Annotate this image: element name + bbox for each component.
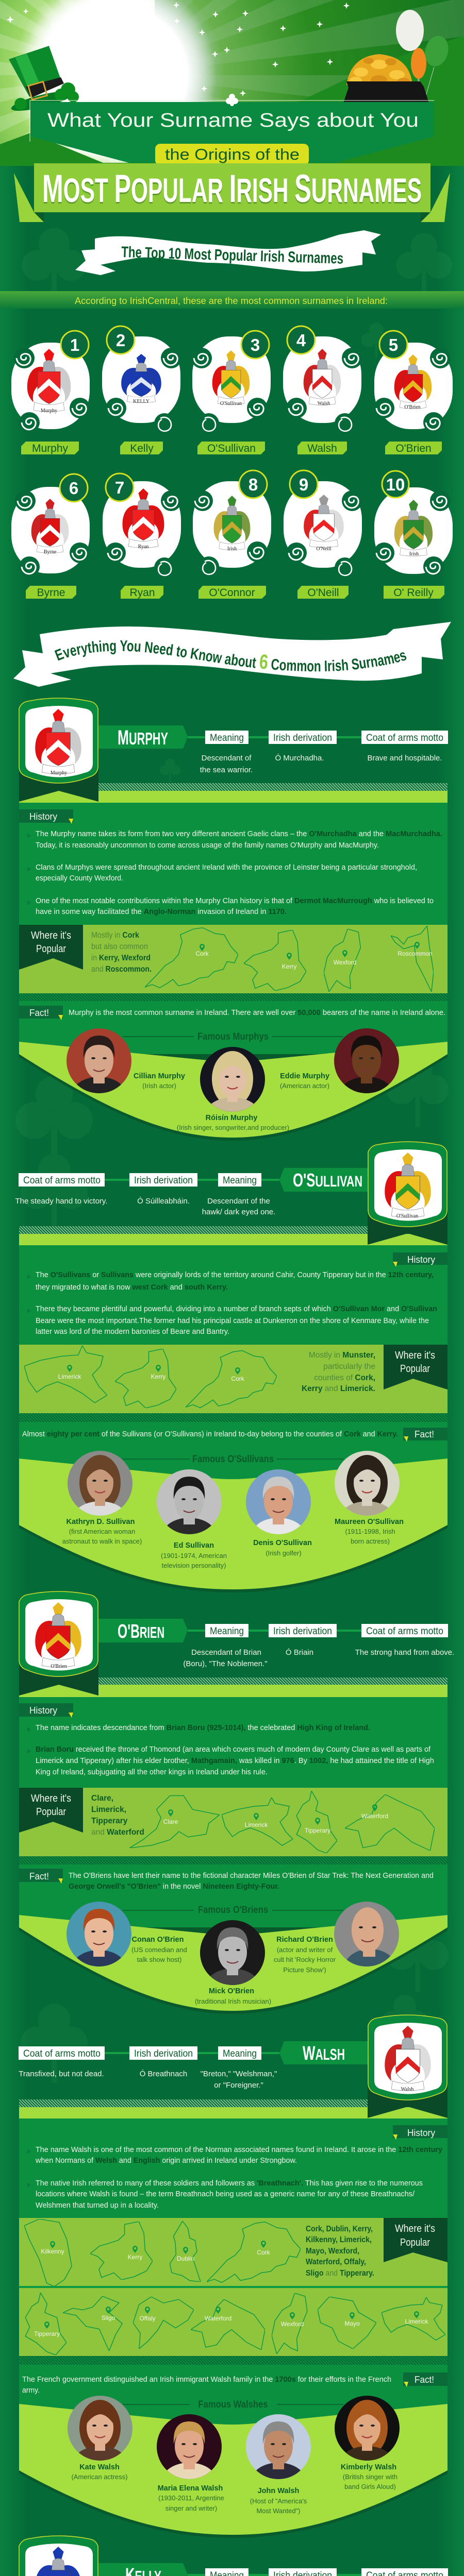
county maps: Sligo — [102, 2314, 115, 2321]
county maps: Roscommon — [397, 950, 433, 957]
famous Walshes — [19, 2396, 448, 2538]
famous O'Sullivans — [19, 1451, 448, 1592]
panel: history: History — [407, 2128, 435, 2138]
values: Ó Murchadha. — [275, 754, 324, 762]
connector and labels — [19, 2046, 279, 2060]
card 8 O'Connor: Irish — [227, 546, 237, 552]
connector and labels: Coat of arms motto — [366, 1626, 443, 1637]
panel: where popular — [19, 1345, 448, 1413]
values: the sea warrior. — [200, 766, 253, 774]
card 3 O'Sullivan — [191, 331, 271, 454]
famous Murphys: (American actor) — [280, 1082, 329, 1090]
county maps: Clare — [163, 1818, 178, 1825]
county maps: Kerry — [128, 2253, 142, 2261]
subtitle pill — [155, 144, 309, 165]
values: The steady hand to victory. — [15, 1197, 107, 1206]
crest badge — [368, 1142, 447, 1227]
county maps — [129, 1791, 435, 1853]
values: The strong hand from above. — [355, 1648, 454, 1657]
card 4 Walsh: 4 — [296, 331, 306, 350]
fact: Fact! — [29, 1008, 49, 1018]
county maps: Waterford — [205, 2315, 231, 2322]
values: Descendant of Brian — [191, 1648, 261, 1657]
panel: history: One of the most notable contributions within the Murphy Clan history is that of Dermot MacMurrough who is believed to — [36, 896, 434, 905]
famous Murphys: (Irish actor) — [142, 1082, 176, 1090]
crest ribbon — [19, 751, 98, 802]
crest badge — [19, 2536, 98, 2576]
connector and labels — [19, 1173, 279, 1187]
county maps — [24, 1346, 277, 1408]
fact: Almost eighty per cent of the Sullivans (or O'Sullivans) in Ireland to-day belong to the counties of Cork and Kerry. — [22, 1430, 398, 1438]
panel: history: especially County Wexford. — [36, 874, 123, 883]
panel: where popular: Where it's — [395, 1350, 435, 1361]
famous Murphys: Róisín Murphy — [206, 1114, 257, 1122]
connector and labels: Coat of arms motto — [23, 2048, 101, 2059]
fact: The French government distinguished an Irish immigrant Walsh family in the 1700s for their efforts in the French — [22, 2375, 391, 2384]
famous Walshes: John Walsh — [258, 2487, 299, 2495]
fact: Fact! — [415, 1429, 434, 1439]
crest ribbon — [19, 1644, 98, 1696]
fact — [19, 1869, 434, 1891]
county maps: Cork — [195, 950, 209, 957]
values — [15, 1197, 275, 1216]
famous O'Sullivans: born actress) — [351, 1537, 390, 1545]
famous Murphys: Cillian Murphy — [134, 1072, 185, 1080]
panel: history — [19, 2119, 448, 2218]
famous Murphys: Famous Murphys — [197, 1031, 269, 1042]
panel: history: locations where Walsh is found – the term Breathnach being used as a generic name for any of these Breathnachs/ — [36, 2190, 415, 2198]
card 10 O' Reilly: Irish — [409, 551, 419, 557]
card 5 O'Brien: O'Brien — [404, 404, 421, 410]
famous O'Sullivans: Kathryn D. Sullivan — [67, 1518, 135, 1526]
famous O'Briens: Famous O'Briens — [198, 1905, 268, 1916]
values — [183, 1648, 454, 1668]
county maps: Mayo — [344, 2320, 360, 2327]
panel: history: The native Irish referred to many of these soldiers and followers as 'Breathnach'. This has given rise to the numerous — [36, 2179, 423, 2188]
card 2 Kelly: 2 — [116, 331, 125, 350]
county maps: Wexford — [334, 959, 356, 966]
county maps: Limerick — [245, 1821, 268, 1828]
famous Walshes: (British singer with — [343, 2473, 397, 2481]
values: Transfixed, but not dead. — [19, 2070, 104, 2078]
main title ribbon — [14, 163, 450, 222]
values: Ó Breathnach — [140, 2070, 187, 2078]
crest badge: Walsh — [401, 2087, 413, 2092]
famous O'Sullivans: astronaut to walk in space) — [62, 1537, 142, 1545]
name ribbon — [279, 2041, 368, 2064]
card 9 O'Neill: 9 — [299, 475, 308, 494]
panel: history: Welshmen that turned up in a locality. — [36, 2201, 159, 2210]
connector and labels: Irish derivation — [134, 2048, 193, 2059]
values: (Boru), "The Noblemen." — [183, 1659, 268, 1668]
county maps — [24, 2219, 445, 2355]
values: Brave and hospitable. — [367, 754, 442, 762]
connector and labels: Meaning — [223, 2048, 257, 2059]
card 8 O'Connor: O'Connor — [209, 587, 255, 599]
panel: fact and famous background — [19, 1001, 448, 1062]
famous Walshes: band Girls Aloud) — [344, 2483, 396, 2490]
card 2 Kelly: Kelly — [130, 443, 154, 454]
famous O'Sullivans: Famous O'Sullivans — [192, 1454, 274, 1465]
famous O'Briens: Richard O'Brien — [276, 1936, 333, 1944]
section: Walsh — [19, 2015, 448, 2538]
famous O'Sullivans: Ed Sullivan — [174, 1541, 214, 1550]
sun rays — [0, 0, 351, 307]
fact: army. — [22, 2386, 40, 2395]
values: "Breton," "Welshman," — [201, 2070, 277, 2078]
fact — [19, 1006, 445, 1020]
card 8 O'Connor: 8 — [248, 475, 258, 494]
county maps: Kerry — [282, 963, 296, 970]
name ribbon — [279, 1168, 368, 1192]
card 7 Ryan — [103, 473, 181, 599]
panel: history — [19, 803, 448, 925]
panel: where popular: Waterford, Offaly, — [306, 2258, 366, 2266]
white ribbon: top 10 — [75, 230, 381, 275]
card 5 O'Brien: 5 — [389, 335, 398, 354]
county maps: Kerry — [151, 1373, 165, 1380]
panel: where popular: Popular — [400, 2237, 430, 2248]
panel: where popular: Mayo, Wexford, — [306, 2247, 359, 2256]
panel: history: Limerick and Tipperary) after his elder brother, Mathgamain, was killed in 976. By 1002, he had attained the title of High — [36, 1756, 434, 1765]
card 5 O'Brien: O'Brien — [395, 443, 432, 454]
famous O'Briens: (traditional Irish musician) — [195, 1997, 271, 2005]
icon: white clover — [226, 94, 238, 106]
title line 1: What Your Surname Says about You — [47, 110, 419, 131]
famous O'Sullivans: Maureen O'Sullivan — [335, 1518, 404, 1526]
famous O'Briens: cult hit 'Rocky Horror — [274, 1956, 336, 1963]
name ribbon: MURPHY — [118, 726, 168, 749]
famous O'Briens: Mick O'Brien — [209, 1987, 254, 1995]
famous Murphys — [19, 1028, 448, 1141]
card 8 O'Connor — [192, 470, 271, 599]
panel: history: King of Ireland, subjugating all the other kings in Ireland under his rule. — [36, 1768, 268, 1776]
panel: where popular: Mostly in Cork — [91, 931, 139, 940]
famous O'Sullivans: (Irish golfer) — [266, 1549, 302, 1557]
panel: history: Brian Boru received the throne of Thomond (an area which covers much of modern day County Clare as well as parts of — [36, 1745, 431, 1754]
section: Murphy — [19, 698, 448, 1141]
stripes and bar — [19, 783, 448, 803]
panel: where popular: Kilkenny, Limerick, — [306, 2235, 372, 2244]
values: Descendant of the — [207, 1197, 270, 1206]
crest badge: Murphy — [51, 770, 67, 776]
card 6 Byrne — [11, 474, 90, 599]
panel: history: when Normans of Welsh and English origin arrived in Ireland under Strongbow. — [35, 2156, 297, 2165]
panel: where popular: and Roscommon. — [91, 965, 152, 974]
panel: where popular: Where it's — [31, 930, 71, 941]
icon: pot of gold — [343, 54, 429, 103]
panel: history: History — [407, 1255, 435, 1265]
panel: where popular: Where it's — [31, 1793, 71, 1804]
icon: leprechaun hat — [9, 46, 79, 115]
section: O'Brien — [19, 1591, 454, 2014]
top ten grid — [11, 326, 453, 599]
famous O'Briens: (US comedian and — [131, 1946, 187, 1954]
card 10 O' Reilly: 10 — [386, 475, 405, 494]
county maps: Kilkenny — [41, 2248, 64, 2255]
connector and labels: Meaning — [223, 1175, 257, 1186]
famous Walshes: Kimberly Walsh — [341, 2463, 396, 2471]
panel: where popular: Popular — [36, 1806, 66, 1818]
crest ribbon — [368, 2067, 448, 2118]
name ribbon — [98, 2563, 188, 2576]
famous Walshes: (American actress) — [71, 2473, 128, 2481]
stars — [7, 2, 350, 96]
panel: where popular: particularly the — [323, 1362, 375, 1371]
county maps: Offaly — [139, 2315, 156, 2322]
values: hawk/ dark eyed one. — [202, 1208, 275, 1216]
card 1 Murphy: 1 — [70, 335, 79, 354]
panel: history: There they became plentiful and powerful, dividing into a number of branch septs of which O'Sullivan Mor and O'Sullivan — [36, 1304, 437, 1313]
county maps — [145, 926, 434, 992]
values — [200, 754, 442, 774]
famous O'Briens: Conan O'Brien — [132, 1936, 184, 1944]
panel: where popular: Tipperary — [91, 1817, 128, 1825]
white ribbon: everything you need: Everything You Need to Know about 6 Common Irish Surnames — [55, 640, 406, 672]
card 10 O' Reilly — [374, 471, 453, 599]
panel: history: latter was lord of the modern baronies of Beare and Bantry. — [36, 1327, 229, 1336]
connector and labels — [188, 1624, 448, 1637]
famous Walshes: Famous Walshes — [198, 2399, 268, 2410]
fact: Fact! — [415, 2375, 434, 2385]
title banner — [30, 94, 434, 163]
panel: history — [19, 1245, 448, 1345]
panel: history: The name indicates descendance from Brian Boru (925-1014), the celebrated High King of Ireland. — [36, 1723, 370, 1732]
card 4 Walsh: Walsh — [318, 401, 330, 406]
icon: balloons — [396, 10, 452, 103]
famous O'Briens: Picture Show') — [283, 1966, 326, 1974]
panel: where popular — [19, 2218, 448, 2356]
famous Murphys: (Irish singer, songwriter,and producer) — [177, 1124, 289, 1131]
panel: history: Today, it is reasonably uncommon to come across usage of the family names O'Murphy and MacMurphy. — [36, 841, 379, 850]
panel: history: they migrated to what is now west Cork and south Kerry. — [36, 1283, 228, 1292]
card 3 O'Sullivan: O'Sullivan — [207, 443, 256, 454]
card 4 Walsh — [283, 326, 362, 454]
card 4 Walsh: Walsh — [307, 443, 337, 454]
card 3 O'Sullivan: 3 — [251, 335, 260, 354]
fact — [22, 2372, 448, 2395]
panel: where popular: in Kerry, Wexford — [91, 954, 151, 962]
crest badge: O'Sullivan — [396, 1213, 418, 1219]
famous O'Sullivans: television personality) — [161, 1562, 226, 1569]
county maps: Tipperary — [34, 2330, 60, 2337]
panel: where popular: Kerry and Limerick. — [302, 1384, 375, 1393]
famous Walshes: Kate Walsh — [79, 2463, 120, 2471]
name ribbon: WALSH — [303, 2043, 345, 2064]
famous Murphys: Eddie Murphy — [280, 1072, 329, 1080]
connector and labels: Meaning — [210, 733, 244, 743]
panel: history: The O'Sullivans or Sullivans were originally lords of the territory around Cahir, County Tipperary but in the 12th century, — [36, 1270, 434, 1279]
fact: Murphy is the most common surname in Ireland. There are well over 50,000 bearers of the name in Ireland alone. — [69, 1008, 445, 1017]
panel: where popular — [19, 1788, 448, 1856]
connector and labels: Coat of arms motto — [23, 1175, 101, 1186]
panel: where popular — [19, 925, 448, 993]
history tab — [19, 809, 73, 824]
famous O'Briens: talk show host) — [137, 1956, 181, 1963]
values: Ó Briain — [286, 1648, 313, 1657]
panel: history: The name Walsh is one of the most common of the Norman associated names found in Ireland. It arose in the 12th century — [36, 2145, 443, 2154]
county maps: Limerick — [405, 2318, 428, 2325]
panel: where popular: Popular — [400, 1363, 430, 1375]
famous Walshes: Most Wanted") — [256, 2507, 301, 2515]
connector and labels — [188, 2568, 448, 2576]
crest badge — [19, 1591, 98, 1676]
card 1 Murphy: Murphy — [41, 408, 57, 414]
county maps: Wexford — [281, 2320, 304, 2328]
card 1 Murphy: Murphy — [32, 443, 69, 454]
county maps: Waterford — [361, 1812, 388, 1820]
famous O'Sullivans: (1901-1974, American — [161, 1552, 227, 1560]
panel: history: Beare were the most important.The former had his principal castle at Dunkerron on the shore of Kenmare Bay, while the — [36, 1316, 429, 1325]
county maps: Dublin — [177, 2255, 194, 2262]
card 1 Murphy — [11, 331, 90, 454]
card 7 Ryan: Ryan — [129, 587, 155, 599]
card 6 Byrne: 6 — [69, 479, 78, 498]
panel: where popular: but also common — [91, 942, 148, 951]
crest badge — [368, 2015, 447, 2100]
famous O'Sullivans: (1911-1998, Irish — [345, 1528, 395, 1535]
name ribbon: O'BRIEN — [118, 1621, 164, 1642]
famous O'Sullivans: (first American woman — [69, 1528, 135, 1535]
connector and labels: Irish derivation — [134, 1175, 193, 1186]
famous Walshes: (1930-2011, Argentine — [158, 2494, 224, 2502]
card 10 O' Reilly: O' Reilly — [393, 587, 434, 599]
subtitle pill: the Origins of the — [165, 145, 300, 163]
panel: where popular: and Waterford — [91, 1828, 144, 1837]
fact: George Orwell's "O'Brien" in the novel Nineteen Eighty-Four. — [69, 1882, 279, 1891]
card 9 O'Neill: O'Neill — [316, 546, 332, 552]
white ribbon: top 10: The Top 10 Most Popular Irish Surnames — [121, 244, 344, 267]
connector and labels: Coat of arms motto — [366, 733, 443, 743]
history tab: History — [29, 811, 57, 822]
famous O'Briens — [19, 1902, 448, 2014]
fact — [22, 1428, 448, 1442]
panel: history: History — [29, 1705, 57, 1716]
panel: where popular: Cork, Dublin, Kerry, — [306, 2225, 373, 2233]
card 9 O'Neill — [284, 470, 362, 599]
fact: Fact! — [29, 1871, 49, 1882]
panel: history: have in some way facilitated the Anglo-Norman invasion of Ireland in 1170. — [36, 907, 287, 916]
panel: where popular: counties of Cork, — [314, 1374, 375, 1382]
card 3 O'Sullivan: O'Sullivan — [220, 401, 242, 406]
panel: where popular: Clare, — [91, 1794, 113, 1803]
values: or "Foreigner." — [214, 2081, 263, 2090]
panel: where popular: Popular — [36, 943, 66, 955]
panel: where popular: Sligo and Tipperary. — [306, 2269, 374, 2278]
famous Walshes: (Host of "America's — [250, 2497, 307, 2505]
intro band — [0, 291, 464, 309]
card 2 Kelly — [102, 326, 181, 454]
panel: history: The Murphy name takes its form from two very different ancient Gaelic clans – the O'Murchadha and the MacMurchadha. — [36, 829, 442, 838]
panel: where popular: Where it's — [395, 2223, 435, 2234]
crest badge — [19, 698, 98, 783]
panel: history: Clans of Murphys were spread throughout ancient Ireland with the province of Leinster being a particular stronghold, — [36, 863, 417, 872]
panel: where popular: Mostly in Munster, — [309, 1351, 375, 1360]
connector and labels — [188, 731, 448, 744]
county maps: Cork — [231, 1375, 245, 1382]
card 7 Ryan: Ryan — [138, 544, 148, 550]
card 6 Byrne: Byrne — [44, 549, 57, 555]
card 5 O'Brien — [374, 331, 453, 454]
connector and labels: Irish derivation — [273, 1626, 332, 1637]
county maps: Limerick — [58, 1373, 81, 1380]
county maps: Tipperary — [305, 1827, 330, 1834]
values: Descendant of — [202, 754, 252, 762]
connector and labels: Meaning — [210, 1626, 244, 1637]
card 9 O'Neill: O'Neill — [307, 587, 339, 599]
intro band: According to IrishCentral, these are the most common surnames in Ireland: — [75, 296, 388, 306]
crest badge: O'Brien — [51, 1664, 67, 1669]
card 2 Kelly: KELLY — [133, 399, 150, 404]
name ribbon: O'SULLIVAN — [293, 1170, 362, 1191]
panel: where popular: Limerick, — [91, 1805, 126, 1814]
famous Walshes: Maria Elena Walsh — [158, 2484, 223, 2493]
fact: The O'Briens have lent their name to the fictional character Miles O'Brien of Star Trek: The Next Generation and — [69, 1871, 434, 1880]
name ribbon — [98, 1619, 188, 1642]
card 6 Byrne: Byrne — [37, 587, 65, 599]
grass — [0, 36, 464, 166]
connector and labels: Irish derivation — [273, 733, 332, 743]
values: Ó Súilleabháin. — [137, 1197, 190, 1206]
section: Kelly — [19, 2536, 448, 2576]
header scene — [0, 0, 464, 307]
famous O'Sullivans: Denis O'Sullivan — [253, 1539, 312, 1547]
panel: history — [19, 1697, 448, 1788]
values — [19, 2070, 277, 2090]
county maps: Cork — [257, 2249, 271, 2256]
crest ribbon — [368, 1194, 448, 1245]
famous O'Briens: (actor and writer of — [277, 1946, 333, 1954]
white ribbon: everything you need — [13, 622, 451, 687]
famous Walshes: singer and writer) — [165, 2504, 217, 2512]
card 7 Ryan: 7 — [115, 478, 124, 497]
section: O'Sullivan — [15, 1142, 448, 1592]
